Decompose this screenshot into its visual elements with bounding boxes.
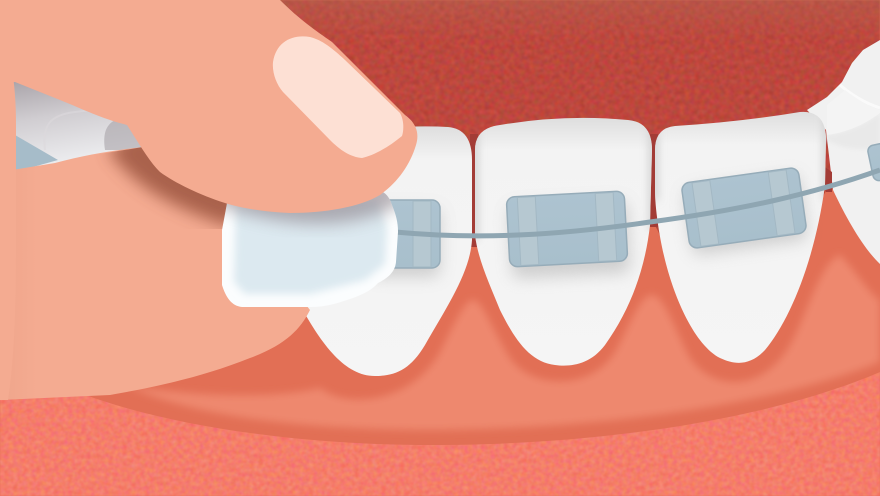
mouth interior background [0,0,880,300]
back teeth on left, behind finger [10,75,160,175]
lower hand and finger [0,138,310,400]
tooth 3 [655,112,826,363]
thumb [0,0,417,213]
bracket 3 on third tooth [681,167,808,256]
bracket 4 partial at right edge [867,140,880,182]
thumbnail [273,36,403,158]
dark gaps between teeth [470,134,832,247]
bracket 1 on first tooth [370,200,440,277]
tooth 2 [475,118,652,366]
archwire [395,170,880,236]
gum [60,188,880,496]
far left finger strip [0,30,16,400]
lighter gum inset [125,255,880,430]
tooth 1 [300,126,472,376]
back teeth, right side [807,40,880,264]
bracket 2 on second tooth [506,191,630,279]
orthodontic wax [222,192,398,307]
lower lip [0,370,880,496]
